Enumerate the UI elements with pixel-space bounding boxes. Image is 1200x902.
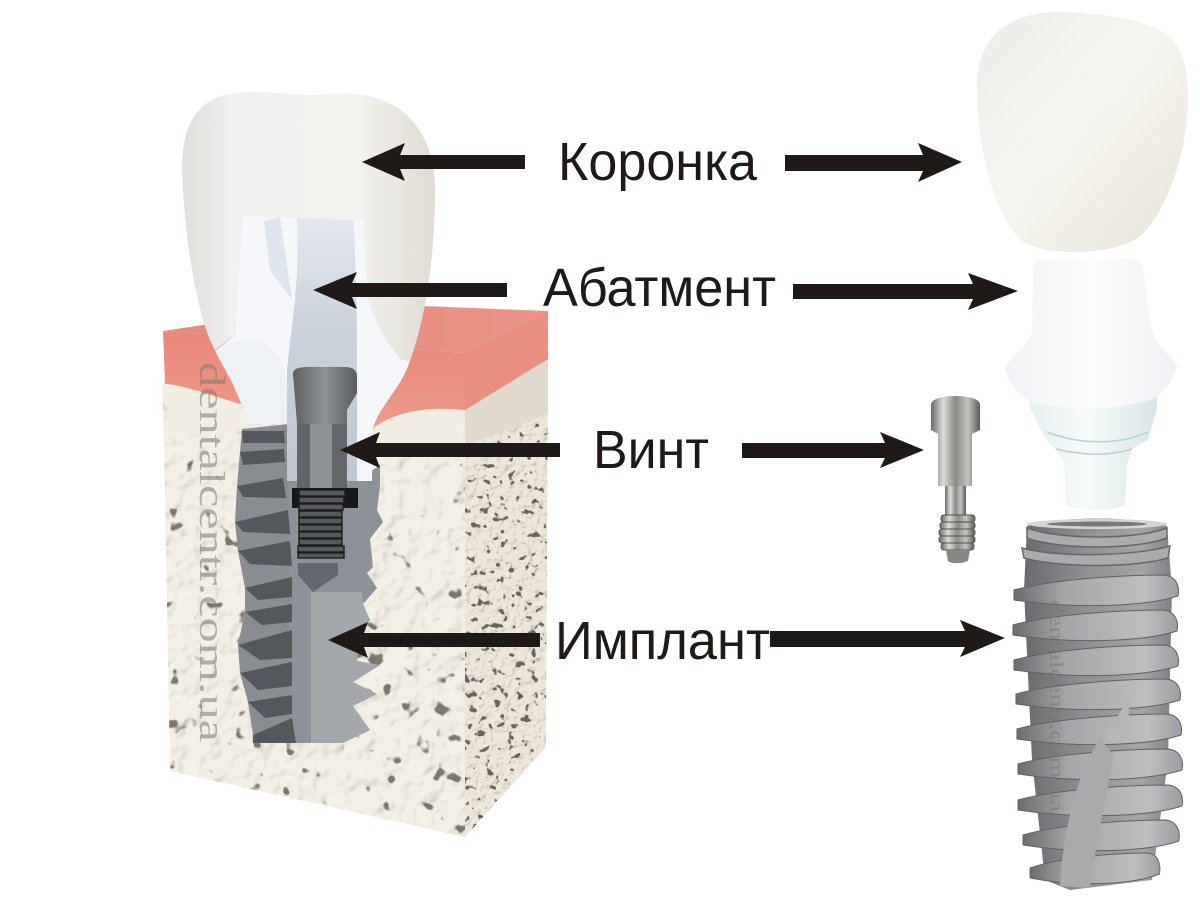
crown in section xyxy=(182,92,435,361)
implant cutting flute xyxy=(1060,738,1114,888)
watermark: left: dentalcentr.com.ua xyxy=(192,362,232,742)
abutment in section xyxy=(215,216,410,481)
arrow: crown right xyxy=(785,143,962,182)
abutment (separate part) xyxy=(1005,258,1177,510)
illustration: implant in bone cross-section xyxy=(163,92,548,837)
label: Винт: Винт xyxy=(593,420,709,480)
label: Абатмент: Абатмент xyxy=(543,258,776,318)
arrow: abutment left xyxy=(313,272,507,309)
implant threads xyxy=(1013,575,1182,884)
arrow: crown left xyxy=(362,143,525,181)
arrow: implant left xyxy=(328,622,540,658)
watermark: right: dentalcentr.com.ua xyxy=(1045,600,1067,812)
bone block xyxy=(163,358,548,837)
implant (separate part) xyxy=(1013,518,1182,890)
label: Имплант: Имплант xyxy=(555,611,770,671)
label: Коронка: Коронка xyxy=(558,132,758,192)
crown (separate part) xyxy=(977,12,1188,252)
arrow: implant right xyxy=(770,620,1005,657)
screw (separate part) xyxy=(931,396,980,563)
arrow: abutment right xyxy=(793,273,1018,310)
implant section xyxy=(235,424,383,743)
gum tissue xyxy=(163,306,548,428)
arrow: screw right xyxy=(742,432,924,468)
arrow: screw left xyxy=(340,432,560,468)
screw in section xyxy=(292,367,358,592)
